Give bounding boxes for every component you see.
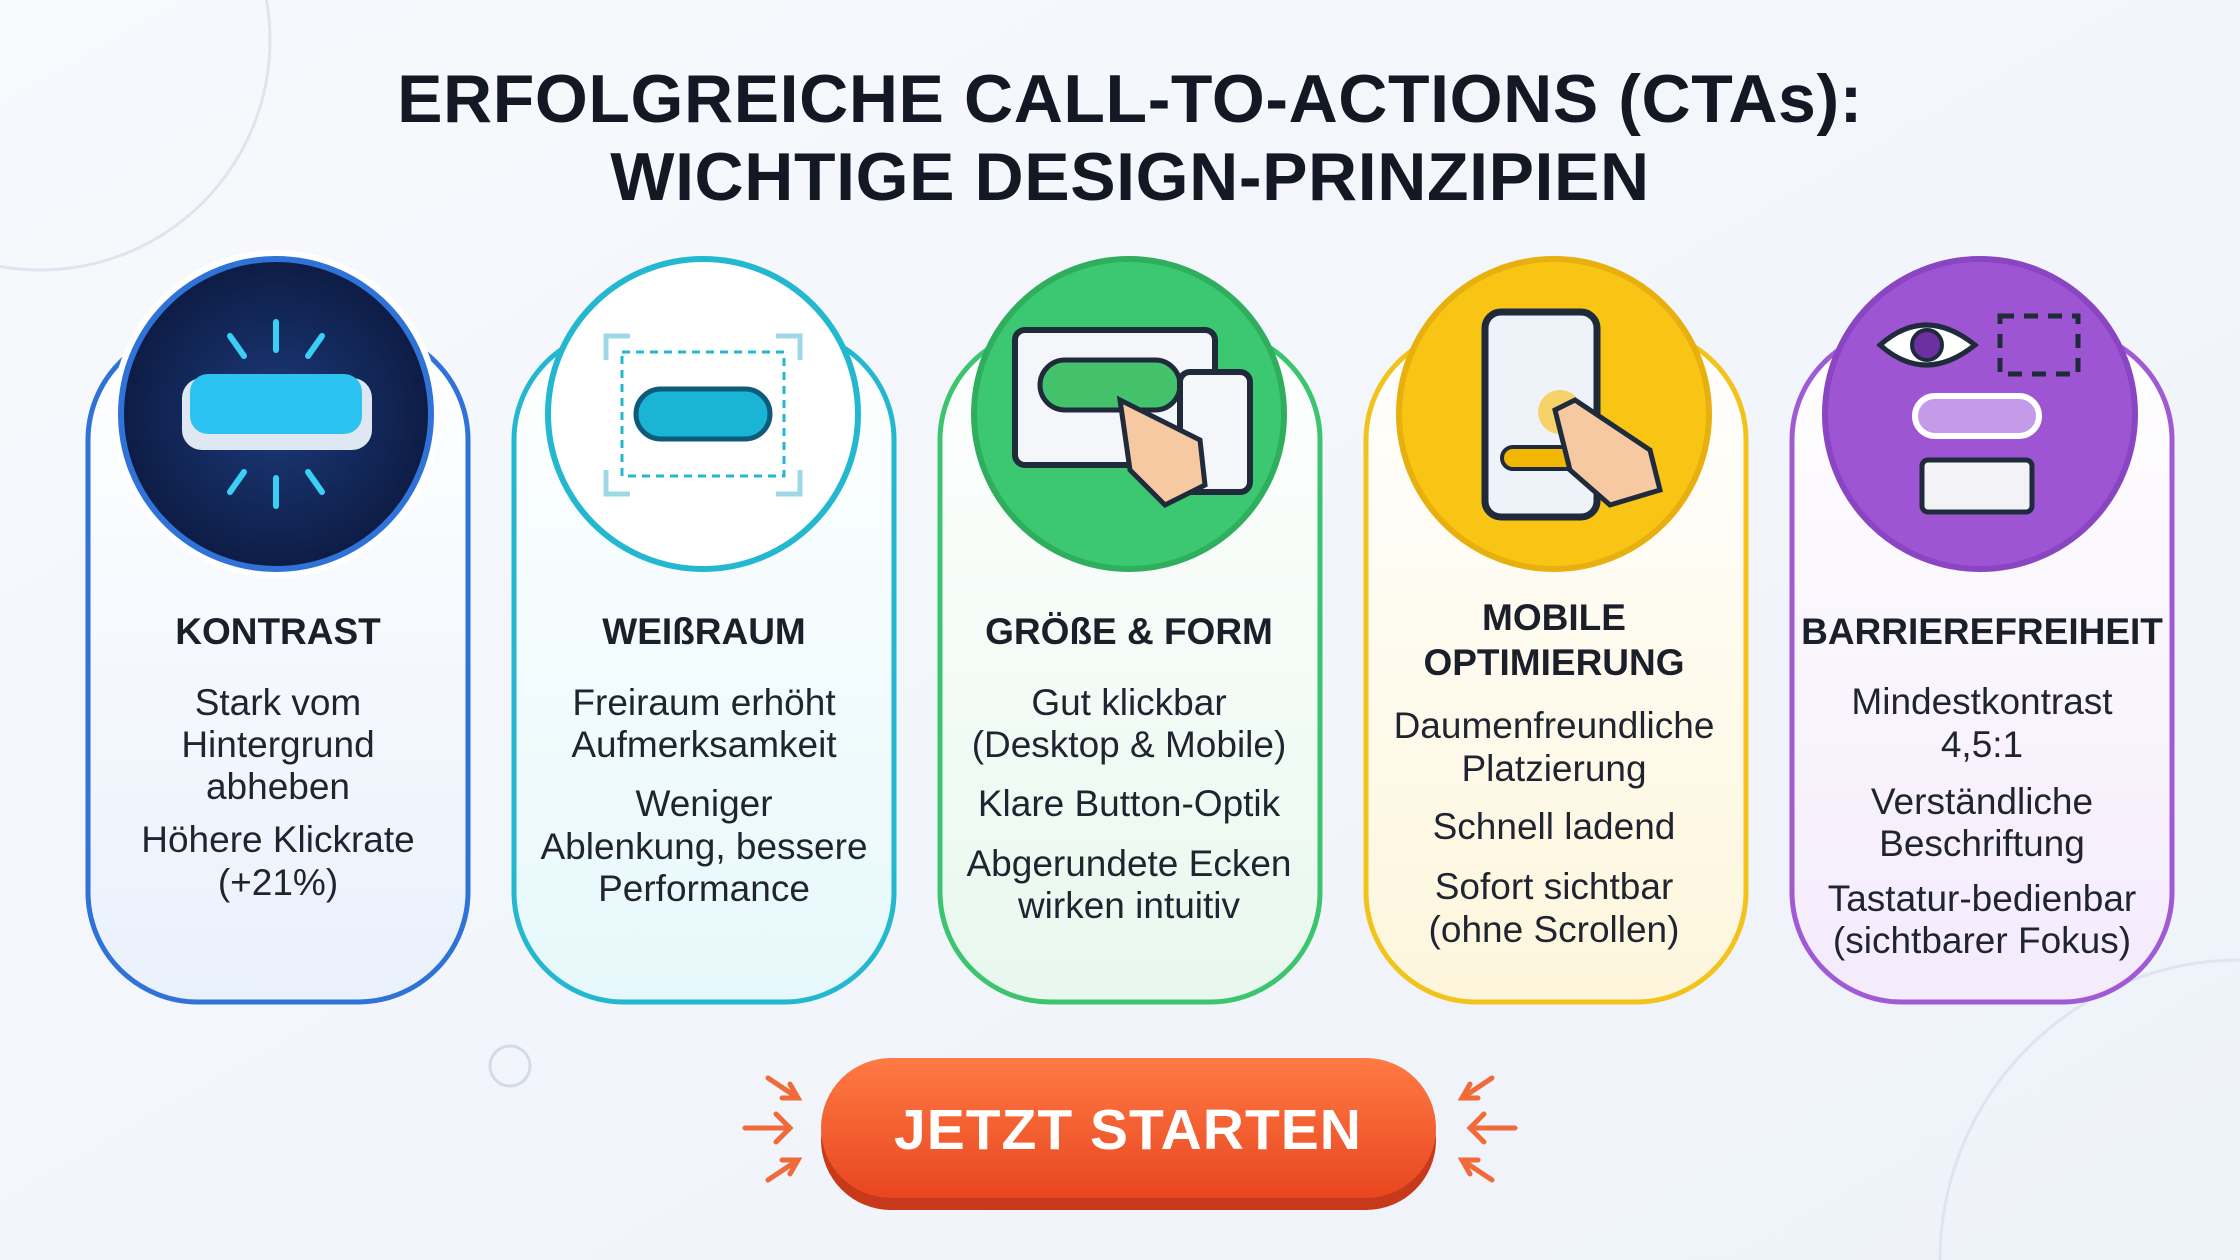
text: Weißraum body: Ablenkung, bessere [540, 826, 868, 867]
button: Jetzt starten [821, 1058, 1436, 1210]
icon: phone with thumb [1399, 259, 1709, 569]
panel: Barrierefreiheit [1792, 259, 2172, 1002]
text: Barrierefreiheit body: (sichtbarer Fokus) [1833, 920, 2131, 961]
text: Mobile body: (ohne Scrollen) [1429, 909, 1679, 950]
text: Weißraum body: Freiraum erhöht [572, 682, 836, 723]
text: Mobile body: Platzierung [1461, 748, 1647, 789]
panel: Kontrast [88, 250, 468, 1002]
text: Kontrast body: Hintergrund [181, 724, 375, 765]
text: Weißraum body [540, 682, 868, 909]
text: Größe body: Abgerundete Ecken [966, 843, 1292, 884]
panel: Weißraum [514, 259, 894, 1002]
text: Barrierefreiheit body: Beschriftung [1879, 823, 2085, 864]
text: Kontrast body: abheben [206, 766, 350, 807]
text: Mobile body [1394, 705, 1714, 950]
panel: Mobile Optimierung [1366, 259, 1746, 1002]
panel: Weißraum: WEIßRAUM [602, 611, 806, 652]
icon: whitespace frame [548, 259, 858, 569]
text: Barrierefreiheit body [1828, 681, 2136, 961]
title: ERFOLGREICHE CALL-TO-ACTIONS (CTAs): [397, 61, 1863, 137]
text: Größe body: Klare Button-Optik [978, 783, 1281, 824]
text: Barrierefreiheit body: Tastatur-bedienbar [1828, 878, 2136, 919]
panel: Kontrast: KONTRAST [175, 611, 381, 652]
panel: Barrierefreiheit: BARRIEREFREIHEIT [1801, 611, 2163, 652]
text: Weißraum body: Aufmerksamkeit [571, 724, 837, 765]
icon: accessibility [1825, 259, 2135, 569]
title [397, 61, 1863, 215]
text: Kontrast body: (+21%) [218, 862, 338, 903]
text: Weißraum body: Performance [598, 868, 810, 909]
text: Barrierefreiheit body: 4,5:1 [1941, 724, 2023, 765]
text: Kontrast body: Stark vom [195, 682, 361, 723]
button: Jetzt starten: JETZT STARTEN [894, 1098, 1362, 1162]
title: WICHTIGE DESIGN-PRINZIPIEN [610, 139, 1650, 215]
text: Kontrast body: Höhere Klickrate [141, 819, 415, 860]
text: Größe body: Gut klickbar [1031, 682, 1227, 723]
text: Mobile body: Schnell ladend [1433, 806, 1675, 847]
icon: glowing button [121, 259, 431, 569]
arrows: right [1462, 1078, 1515, 1180]
arrows: left [745, 1078, 798, 1180]
text: Größe body [966, 682, 1292, 926]
panel: Mobile Optimierung: MOBILE [1482, 597, 1626, 638]
text: Weißraum body: Weniger [635, 783, 773, 824]
text: Barrierefreiheit body: Verständliche [1871, 781, 2093, 822]
panel: Größe & Form: GRÖßE & FORM [985, 611, 1273, 652]
panel: Größe & Form [940, 259, 1320, 1002]
text: Kontrast body [141, 682, 415, 903]
icon: desktop and mobile click [974, 259, 1284, 569]
text: Größe body: wirken intuitiv [1017, 885, 1241, 926]
panel: Mobile Optimierung: OPTIMIERUNG [1423, 642, 1685, 683]
text: Mobile body: Daumenfreundliche [1394, 705, 1714, 746]
text: Barrierefreiheit body: Mindestkontrast [1851, 681, 2113, 722]
text: Mobile body: Sofort sichtbar [1435, 866, 1673, 907]
text: Größe body: (Desktop & Mobile) [972, 724, 1286, 765]
